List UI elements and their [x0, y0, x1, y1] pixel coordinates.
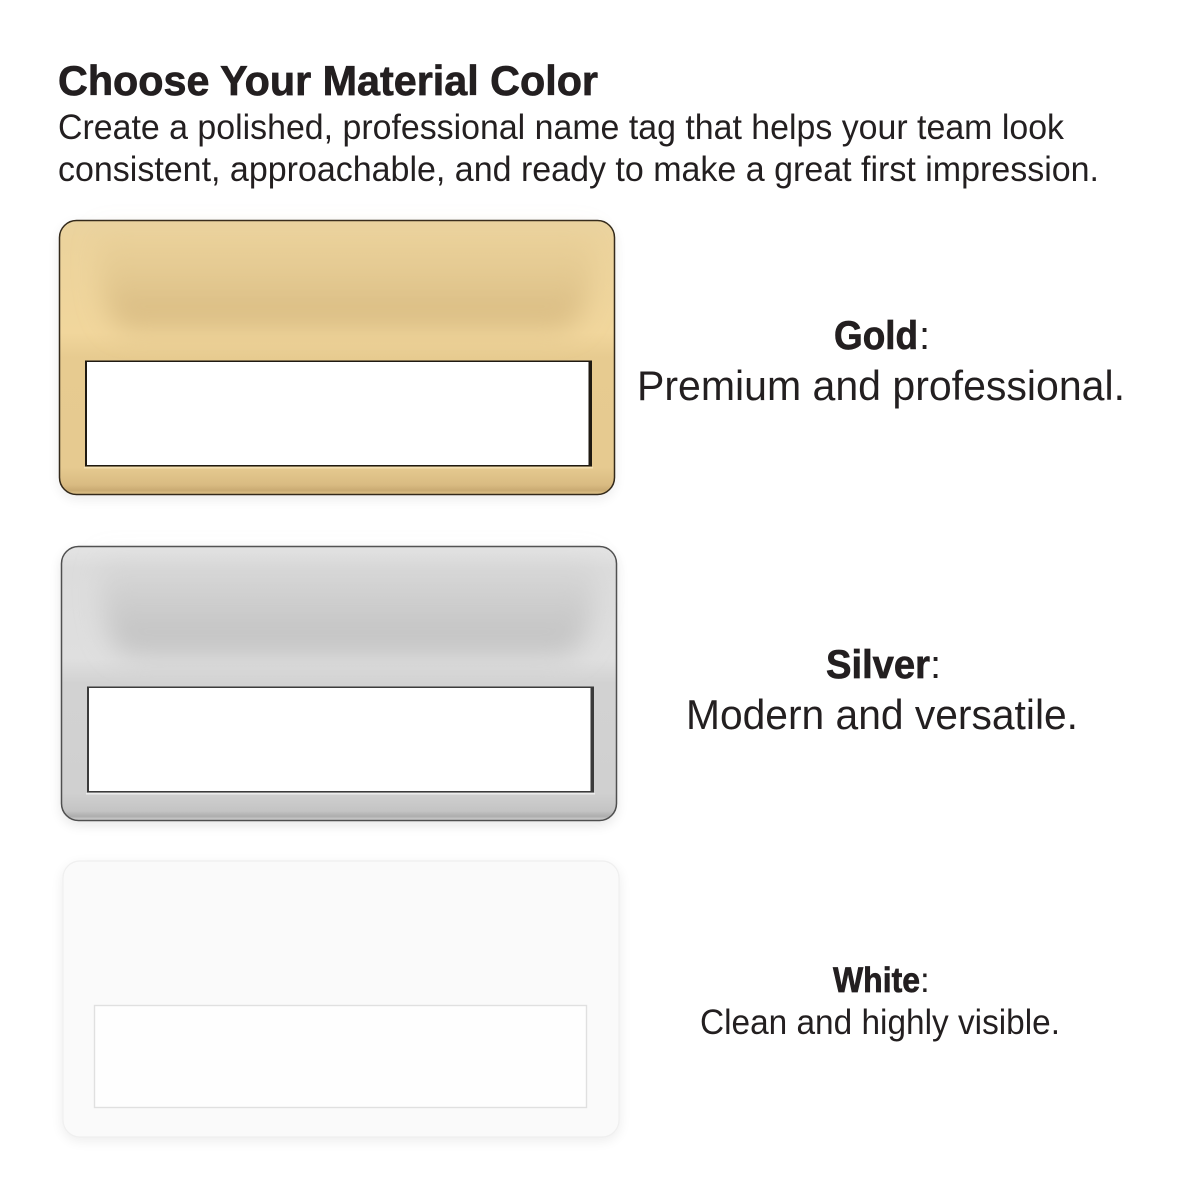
intro text: consistent, approachable, and ready to make a great first impression. [58, 150, 1099, 189]
white label [700, 961, 1060, 1042]
silver name tag [61, 546, 617, 825]
silver label [686, 643, 1078, 738]
gold label: Premium and professional. [637, 362, 1125, 409]
white label: White [833, 961, 920, 1000]
silver label: Silver [826, 643, 930, 687]
silver label: Modern and versatile. [686, 691, 1078, 738]
silver label: : [930, 643, 941, 687]
gold label: Gold [834, 314, 918, 358]
white label: Clean and highly visible. [700, 1003, 1060, 1042]
title: Choose Your Material Color [58, 57, 598, 104]
intro text [58, 108, 1099, 189]
intro text: Create a polished, professional name tag that helps your team look [58, 108, 1064, 147]
white label: : [920, 961, 930, 1000]
white name tag [62, 861, 620, 1141]
gold label: : [919, 314, 930, 358]
gold name tag [59, 220, 615, 499]
gold label [637, 314, 1125, 409]
